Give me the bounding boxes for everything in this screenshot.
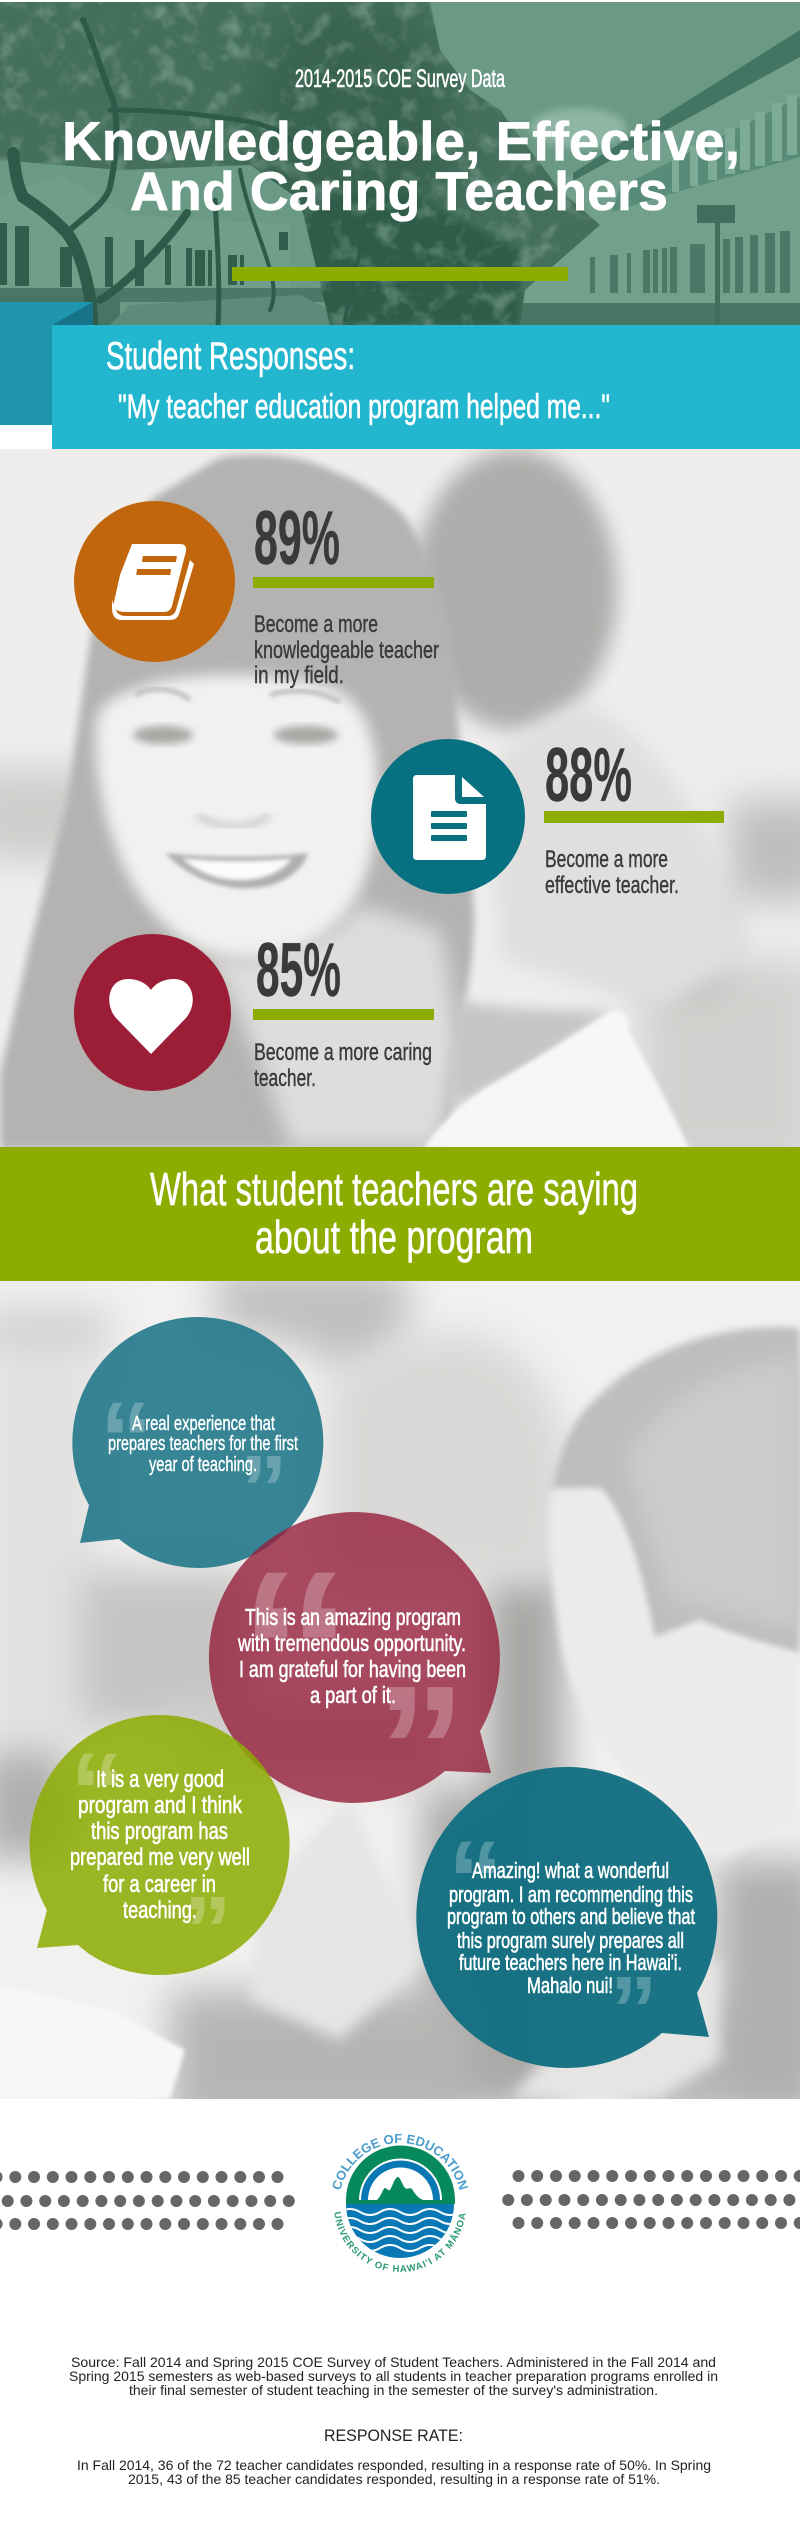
open quote: “ (100, 1381, 152, 1498)
description: Become a more caring (254, 1039, 432, 1066)
speech bubble: real experience (72, 1317, 323, 1568)
open quote: “ (448, 1819, 503, 1942)
white paper, lower left (136, 2028, 186, 2099)
description (545, 846, 679, 899)
header photo: campus courtyard with trees (0, 0, 800, 330)
description: knowledgeable teacher (254, 637, 439, 664)
quote text: I am grateful for having been (239, 1656, 466, 1682)
face (96, 675, 377, 960)
speech bubble: amazing program (209, 1512, 500, 1850)
close quote: ” (376, 1649, 466, 1850)
logo: College of Education seal (332, 2134, 468, 2272)
long hair (0, 455, 474, 1149)
open quote: “ (70, 1731, 125, 1854)
quote text: prepared me very well (70, 1844, 250, 1871)
title: And Caring Teachers (130, 160, 668, 222)
quote text (70, 1766, 250, 1924)
icon: heart (74, 934, 231, 1091)
description: Become a more (254, 611, 378, 638)
close quote: ” (240, 1436, 288, 1542)
value: 89% (254, 496, 340, 581)
blouse (423, 1011, 689, 1149)
quote text: Amazing! what a wonderful (472, 1858, 669, 1883)
quote text (237, 1604, 466, 1708)
stat: 89% knowledgeable (74, 496, 439, 689)
source note (69, 2354, 718, 2398)
bar (253, 577, 434, 588)
response rate heading: RESPONSE RATE: (324, 2426, 463, 2445)
source note: their final semester of student teaching in the semester of the survey's administration. (129, 2382, 658, 2398)
tree canopy (0, 0, 620, 330)
speech bubble: very good program (30, 1715, 290, 1983)
speech bubble: amazing wonderful (416, 1767, 717, 2068)
section heading: about the program (255, 1211, 533, 1263)
building on the right (520, 30, 800, 325)
subtitle: survey data: 2014-2015 COE Survey Data (295, 65, 505, 93)
quote text: for a career in (103, 1871, 216, 1898)
description: effective teacher. (545, 872, 679, 899)
response rate note (77, 2457, 711, 2487)
quote text: with tremendous opportunity. (237, 1630, 466, 1656)
logo: College of Education seal: COLLEGE OF EDUCATION (332, 2134, 468, 2190)
right student's face and neck (550, 1490, 800, 1860)
value: 85% (256, 928, 341, 1013)
white shirt, lower centre (510, 1960, 720, 2099)
title: Knowledgeable, Effective, (62, 110, 740, 172)
source note: Spring 2015 semesters as web-based surveys to all students in teacher preparation programs enrolled in (69, 2368, 718, 2384)
quote text: prepares teachers for the first (108, 1433, 298, 1455)
title accent bar (232, 267, 568, 281)
eyes, nose and smile (133, 689, 340, 888)
quote text (108, 1413, 298, 1476)
quote text: year of teaching. (149, 1454, 257, 1476)
quote text: this program has (91, 1818, 228, 1845)
bar (253, 1009, 434, 1020)
quote text: program. I am recommending this (449, 1882, 693, 1907)
value: 88% (545, 733, 632, 818)
description (254, 1039, 432, 1092)
response rate note: In Fall 2014, 36 of the 72 teacher candidates responded, resulting in a response rate of 50%. In Spring (77, 2457, 711, 2473)
background person's shoulder (490, 708, 745, 1010)
shoulder fabric (450, 1000, 612, 1110)
description: Become a more (545, 846, 668, 873)
quote text: This is an amazing program (245, 1604, 461, 1630)
source note: Source: Fall 2014 and Spring 2015 COE Survey of Student Teachers. Administered in the Fall 2014 and (71, 2354, 716, 2370)
stat: 88% effective (371, 733, 724, 899)
quote text: teaching. (123, 1897, 197, 1924)
quote text: a part of it. (310, 1682, 396, 1708)
open quote: “ (238, 1523, 353, 1780)
icon: book (74, 501, 235, 662)
quote text: future teachers here in Hawai'i. (459, 1950, 682, 1975)
panel: student responses banner (52, 325, 800, 449)
panel: what student teachers are saying (0, 1147, 800, 1281)
dotted divider right (502, 2170, 800, 2229)
photo panel: classroom background (0, 1270, 800, 2130)
quote text: this program surely prepares all (457, 1928, 684, 1953)
lower window row (590, 231, 790, 293)
close quote: ” (184, 1877, 232, 1983)
stat: 85% caring (74, 928, 434, 1092)
banner quote: "My teacher education program helped me..." (118, 388, 610, 426)
background person's head (413, 450, 617, 730)
tree trunks and branches (13, 20, 365, 325)
bar (544, 811, 724, 823)
description (254, 611, 439, 689)
quote text (447, 1858, 695, 1998)
left low building (0, 223, 330, 325)
close quote: ” (610, 1957, 658, 2063)
description: in my field. (254, 662, 344, 689)
icon: document (371, 739, 525, 894)
middle student's blonde head (327, 1333, 570, 1580)
quote text: program and I think (78, 1792, 243, 1819)
right student's hair (552, 1327, 800, 1655)
title (62, 110, 740, 222)
logo: College of Education seal: UNIVERSITY OF HAWAI'I AT MĀNOA (334, 2212, 466, 2272)
response rate note: 2015, 43 of the 85 teacher candidates responded, resulting in a response rate of 51%. (128, 2471, 660, 2487)
quote text: A real experience that (132, 1413, 275, 1435)
cloud (530, 108, 626, 148)
white shoulder in foreground (250, 1800, 425, 2040)
photo panel: smiling student background (0, 449, 800, 1170)
neck and shoulder (205, 905, 460, 1147)
quote text: Mahalo nui! (527, 1973, 613, 1998)
quote text: program to others and believe that (447, 1904, 695, 1929)
description: teacher. (254, 1065, 316, 1092)
dotted divider left (0, 2171, 295, 2230)
quote text: It is a very good (96, 1766, 224, 1793)
banner heading: Student Responses: (106, 335, 355, 378)
section heading (150, 1163, 638, 1263)
cyan banner fold (0, 302, 93, 425)
